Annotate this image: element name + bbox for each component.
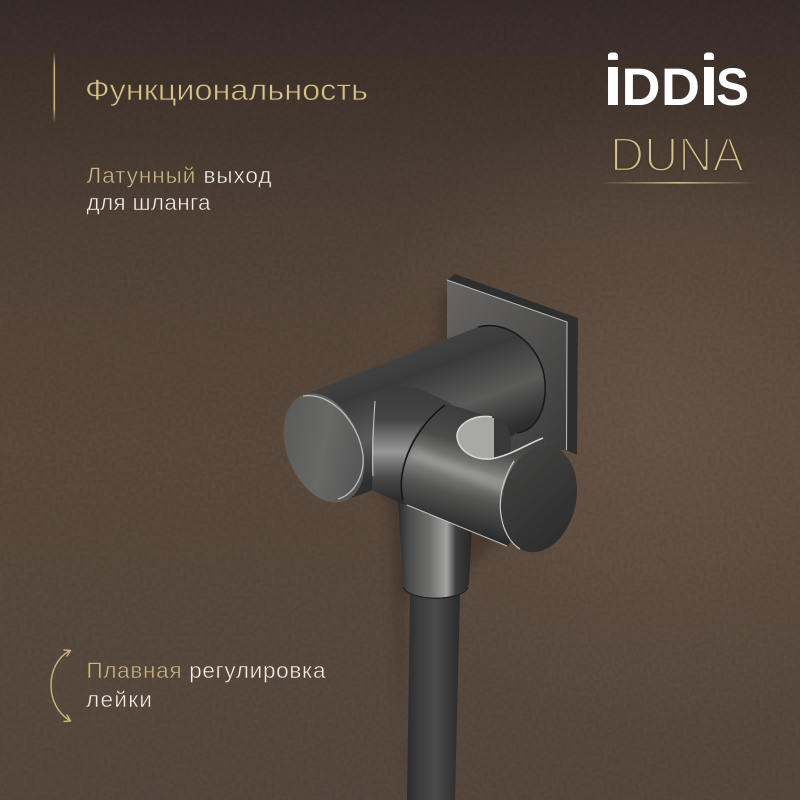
main cylinder [303,326,545,503]
wall shadow [330,290,560,800]
hose [407,595,460,800]
accent line beside heading [54,52,55,123]
text block: smooth adjustment: лейки [86,687,152,712]
text block: brass outlet: Латунный выход [86,163,272,188]
wall plate [447,274,578,455]
left end cap [268,381,380,515]
neck highlight [373,401,375,476]
text block: smooth adjustment [86,658,326,712]
underline below series name [600,182,756,184]
series name: DUNA: DUNA [610,129,744,182]
neck section [372,386,452,505]
adjustable holder body [401,405,560,546]
hose elbow [398,498,472,598]
logo: IDDIS: i [699,41,719,121]
logo: IDDIS: D [622,58,660,117]
text block: brass outlet [86,163,272,215]
logo: IDDIS: i [603,41,623,121]
holder slot [457,416,511,462]
text block: smooth adjustment: Плавная регулировка [86,658,326,683]
logo: IDDIS: D [661,58,700,117]
title: Функциональность [85,74,368,107]
right end cap [491,438,587,560]
logo: IDDIS: S [716,58,749,117]
text block: brass outlet: для шланга [86,190,211,215]
icon: rotation arrow [51,650,70,722]
logo: IDDIS [608,52,748,106]
product: wall outlet with holder [268,274,587,800]
